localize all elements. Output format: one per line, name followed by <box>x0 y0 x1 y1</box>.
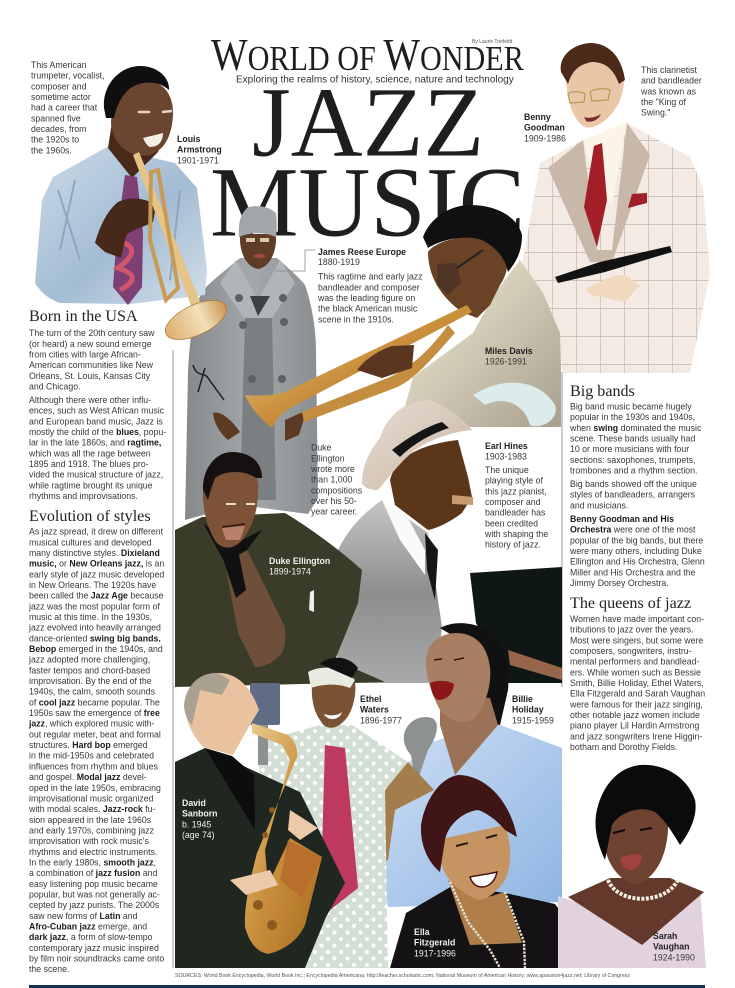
label: Duke Ellington: Duke Ellington <box>269 556 330 566</box>
label: Louis Armstrong: Armstrong <box>177 145 222 155</box>
label: Louis Armstrong blurb: trumpeter, vocalist, <box>31 71 104 81</box>
paragraph: influences from rhythm and blues <box>29 761 159 771</box>
smile and eyes <box>324 712 342 719</box>
head <box>203 464 258 548</box>
paragraph: vided the musical structure of jazz, <box>29 470 163 480</box>
label: Ethel Waters: Waters <box>360 705 389 715</box>
figure: Benny Goodman <box>522 43 710 373</box>
paragraph: musical cultures and developed <box>29 537 152 547</box>
label: Duke Ellington blurb: wrote more <box>310 464 355 474</box>
paragraph: Bebop emerged in the 1940s, and <box>29 644 163 654</box>
label: Earl Hines: 1903-1983 <box>485 452 527 462</box>
paragraph: Orchestra were one of the most <box>570 525 696 535</box>
vest <box>225 550 285 667</box>
label: Duke Ellington blurb: than 1,000 <box>311 475 352 485</box>
label: Miles Davis: Miles Davis <box>485 346 533 356</box>
paragraph: 1950s saw the emergence of free <box>29 708 160 718</box>
paragraph: ences, such as West African music <box>29 406 165 416</box>
paragraph: popular of the big bands, but there <box>570 535 703 545</box>
paragraph: Ellington and His Orchestra, Glenn <box>570 557 705 567</box>
label: Ethel Waters: 1896-1977 <box>360 715 402 725</box>
paragraph: scene. These bands usually had <box>570 433 695 443</box>
paragraph: mental performers and bandlead- <box>570 657 699 667</box>
footer rule <box>29 985 705 988</box>
neck <box>108 118 172 178</box>
paragraph: composers, songwriters, instru- <box>570 646 692 656</box>
paragraph: improvisation. By the end of the <box>29 676 152 686</box>
shirt <box>205 748 255 830</box>
subtitle: Exploring the realms of history, science, nature and technology <box>236 74 514 86</box>
hair <box>440 623 508 725</box>
paragraph: and musicians. <box>570 500 628 510</box>
label: Louis Armstrong blurb: sometime actor <box>31 92 91 102</box>
lips <box>430 681 454 700</box>
figure: Miles Davis <box>245 205 561 428</box>
paragraph: jazz was the most popular form of <box>28 601 160 611</box>
trumpet <box>245 305 472 428</box>
hair <box>595 765 696 860</box>
paragraph: Women have made important con- <box>570 614 704 624</box>
figure: Ella Fitzgerald <box>390 775 603 968</box>
label: Duke Ellington blurb: year career. <box>311 507 357 517</box>
paragraph: from cities with large African- <box>29 350 141 360</box>
title block <box>210 31 525 258</box>
neck <box>440 695 498 775</box>
paragraph: sion appeared in the late 1960s <box>29 815 152 825</box>
paragraph: were many others, including Duke <box>569 546 702 556</box>
heading: Born in the USA <box>29 308 138 325</box>
dark shirt and tie <box>203 523 262 563</box>
paragraph: The turn of the 20th century saw <box>29 328 155 338</box>
paragraph: popular, but was not generally ac- <box>29 889 160 899</box>
paragraph: 1940s, the calm, smooth sounds <box>29 687 156 697</box>
figure: Duke Ellington <box>175 452 385 687</box>
label: Earl Hines: history of jazz. <box>485 540 541 550</box>
label: James Reese Europe <box>275 247 423 324</box>
label: James Reese Europe: This ragtime and early jazz <box>318 272 423 282</box>
paragraph: jazz adopted more challenging, <box>28 655 150 665</box>
heading: Evolution of styles <box>29 508 151 525</box>
face <box>426 633 490 722</box>
smile <box>470 872 497 887</box>
label: Louis Armstrong blurb: decades, from <box>31 124 86 134</box>
paragraph: Afro-Cuban jazz emerge, and <box>29 921 147 931</box>
arm and hand <box>95 199 156 258</box>
tie <box>320 745 358 918</box>
label: Duke Ellington blurb: Duke <box>311 443 332 453</box>
sources: SOURCES: World Book Encyclopedia, World Book Inc.; Encyclopedia Americana, http://teacher.scholastic.com; National Museum of American History; www.apassion4jazz.net; Library of Congress <box>175 973 630 979</box>
paragraph: ers. While women such as Bessie <box>570 667 701 677</box>
label: Benny Goodman blurb: Swing." <box>641 108 670 118</box>
hair <box>421 775 517 872</box>
section: The queens of jazz <box>569 595 705 752</box>
paragraph: and gospel. Modal jazz devel- <box>29 772 147 782</box>
shirt <box>35 147 207 304</box>
paragraph: Jimmy Dorsey Orchestra. <box>570 578 669 588</box>
paragraph: Benny Goodman and His <box>570 514 674 524</box>
paragraph: Most were singers, but some were <box>570 635 703 645</box>
paragraph: improvisational music organized <box>29 793 154 803</box>
paragraph: trombones and a rhythm section. <box>570 465 697 475</box>
heading: Big bands <box>570 383 635 400</box>
paragraph: improvisation with rock music's <box>29 836 149 846</box>
paragraph: popular in the 1930s and 1940s, <box>570 412 695 422</box>
paragraph: music at this time. In the 1930s, <box>29 612 152 622</box>
label: Louis Armstrong blurb: spanned five <box>31 113 81 123</box>
paragraph: which was all the rage between <box>28 448 151 458</box>
label: James Reese Europe: the black American music <box>318 304 418 314</box>
label: Louis Armstrong blurb: This American <box>31 60 87 70</box>
paragraph: in New Orleans. The 1920s have <box>29 580 156 590</box>
jacket <box>175 513 385 687</box>
paragraph: 1895 and 1918. The blues pro- <box>29 459 149 469</box>
paragraph: sections: saxophones, trumpets, <box>570 455 695 465</box>
label: Benny Goodman blurb: This clarinetist <box>641 65 697 75</box>
paragraph: piano player Lil Hardin Armstrong <box>570 721 700 731</box>
paragraph: faster tempos and chord-based <box>29 665 150 675</box>
cigar <box>452 495 473 505</box>
paragraph: American communities like New <box>29 360 154 370</box>
label: Ella Fitzgerald: Ella <box>414 927 430 937</box>
label: Benny Goodman: Goodman <box>524 123 565 133</box>
label: James Reese Europe: was the leading figure on <box>317 293 415 303</box>
label: David Sanborn: b. 1945 <box>182 819 211 829</box>
label: Benny Goodman blurb: and bandleader <box>641 76 702 86</box>
paragraph: out regular meter, beat and formal <box>29 729 161 739</box>
label: James Reese Europe: 1880-1919 <box>318 257 360 267</box>
label: Ella Fitzgerald: 1917-1996 <box>414 948 456 958</box>
polka dot dress <box>258 725 408 968</box>
paragraph: Miller and His Orchestra and the <box>570 567 696 577</box>
label: David Sanborn: David <box>182 798 206 808</box>
black top <box>390 886 603 968</box>
label: Sarah Vaughan: Sarah <box>653 931 677 941</box>
label: James Reese Europe: scene in the 1910s. <box>318 314 394 324</box>
label: Earl Hines: Earl Hines <box>485 441 528 451</box>
label: Louis Armstrong blurb: the 1920s to <box>31 135 79 145</box>
smoke swirl <box>473 383 556 426</box>
paragraph: been called the Jazz Age because <box>29 591 163 601</box>
label: Earl Hines: with shaping the <box>484 529 548 539</box>
label: Miles Davis: 1926-1991 <box>485 357 527 367</box>
hands <box>357 345 414 378</box>
paragraph: a combination of jazz fusion and <box>29 868 157 878</box>
paragraph: other notable jazz women include <box>570 710 700 720</box>
series title: WORLD OF WONDER <box>211 31 524 81</box>
paragraph: botham and Dorothy Fields. <box>570 742 678 752</box>
paragraph: when swing dominated the music <box>570 423 701 433</box>
label: Benny Goodman blurb: was known as <box>640 86 697 96</box>
label: Louis Armstrong blurb: composer and <box>31 81 87 91</box>
label: Duke Ellington: 1899-1974 <box>269 567 311 577</box>
section: Evolution of styles <box>28 508 164 974</box>
paragraph: music, or New Orleans jazz, is an <box>29 559 164 569</box>
paragraph: saw new forms of Latin and <box>29 911 137 921</box>
paragraph: Orleans, St. Louis, Kansas City <box>29 371 151 381</box>
label: Earl Hines: bandleader has <box>485 508 546 518</box>
paragraph: contemporary jazz music inspired <box>29 943 159 953</box>
label: Duke Ellington blurb: Ellington <box>311 453 345 463</box>
eyes <box>456 835 497 846</box>
label: Benny Goodman blurb: the "King of <box>641 97 687 107</box>
hands <box>230 870 278 895</box>
label: David Sanborn: Sanborn <box>182 809 218 819</box>
saxophone <box>245 723 322 954</box>
hair <box>184 673 230 725</box>
paragraph: jazz evolved into heavily arranged <box>28 623 161 633</box>
label: Louis Armstrong: Louis <box>177 134 200 144</box>
label: Sarah Vaughan: 1924-1990 <box>653 952 695 962</box>
paragraph: dance-oriented swing big bands. <box>29 633 161 643</box>
label: Earl Hines: been credited <box>485 518 538 528</box>
label: Billie Holiday: 1915-1959 <box>512 715 554 725</box>
paragraph: while ragtime brought its unique <box>28 480 153 490</box>
figure: Sarah Vaughan <box>558 765 706 968</box>
paragraph: dark jazz, a form of slow-tempo <box>29 932 153 942</box>
paragraph: Big band music became hugely <box>570 401 692 411</box>
paragraph: tributions to jazz over the years. <box>570 625 694 635</box>
face <box>604 804 668 884</box>
figure: James Reese Europe <box>185 206 318 520</box>
shirt and tie <box>583 122 627 205</box>
microphone box <box>250 683 280 725</box>
paragraph: 10 or more musicians with four <box>570 444 689 454</box>
paragraph: many distinctive styles. Dixieland <box>29 548 160 558</box>
paragraph: As jazz spread, it drew on different <box>29 527 164 537</box>
paragraph: styles of bandleaders, arrangers <box>570 490 696 500</box>
hair <box>203 452 262 500</box>
label: Earl Hines: The unique <box>485 465 529 475</box>
byline: By Laurie Triefeldt <box>472 39 513 45</box>
paragraph: the scene. <box>29 964 69 974</box>
hat <box>362 400 472 490</box>
head <box>111 82 173 156</box>
figure: David Sanborn <box>175 673 345 968</box>
paragraph: Big bands showed off the unique <box>570 479 697 489</box>
label: Benny Goodman: 1909-1986 <box>524 133 566 143</box>
label: Ethel Waters: Ethel <box>360 694 381 704</box>
paragraph: and European band music, Jazz is <box>29 416 163 426</box>
paragraph: In the early 1980s, smooth jazz, <box>29 857 156 867</box>
paragraph: jazz, which explored music with- <box>29 719 154 729</box>
paragraph: Although there were other influ- <box>29 395 151 405</box>
jacket <box>405 260 561 427</box>
label: Duke Ellington blurb: over his 50- <box>311 496 357 506</box>
clarinet <box>555 246 672 283</box>
headline jazz: JAZZ <box>252 66 484 178</box>
pocket square <box>628 193 647 208</box>
paragraph: in the mid-1950s and celebrated <box>29 751 154 761</box>
paragraph: structures. Hard bop emerged <box>29 740 148 750</box>
hair <box>423 205 522 272</box>
label: Sarah Vaughan: Vaughan <box>653 942 689 952</box>
section: Born in the USA <box>28 308 166 501</box>
suit <box>175 748 345 968</box>
label: Earl Hines: playing style of <box>485 476 543 486</box>
chest <box>568 878 704 945</box>
paragraph: mostly the child of the blues, popu- <box>29 427 166 437</box>
paragraph: were famous for their jazz singing, <box>569 699 703 709</box>
white lower panel <box>175 687 563 970</box>
label: Earl Hines <box>484 441 548 550</box>
label: Louis Armstrong: 1901-1971 <box>177 155 219 165</box>
figure: Louis Armstrong <box>35 66 232 348</box>
label: James Reese Europe: bandleader and composer <box>318 282 420 292</box>
figure: Billie Holiday <box>368 623 562 907</box>
sunglasses <box>437 263 461 295</box>
paragraph: and early 1970s, combining jazz <box>29 825 154 835</box>
hair <box>104 66 169 118</box>
paragraph: oped in the late 1950s, embracing <box>29 783 161 793</box>
face <box>437 825 510 900</box>
paragraph: with modal scales. Jazz-rock fu- <box>29 804 155 814</box>
paragraph: by film noir soundtracks came onto <box>29 953 164 963</box>
head <box>428 237 508 318</box>
label: Duke Ellington blurb: compositions <box>311 485 363 495</box>
piano <box>470 567 562 683</box>
pearl necklace <box>450 882 525 968</box>
figure: Earl Hines <box>335 400 562 683</box>
tie <box>113 175 143 305</box>
head <box>312 682 355 728</box>
label: Billie Holiday: Holiday <box>512 705 544 715</box>
label: Louis Armstrong blurb: the 1960s. <box>31 145 72 155</box>
suit <box>522 123 710 373</box>
paragraph: lar in the late 1860s, and ragtime, <box>29 438 161 448</box>
label: David Sanborn: (age 74) <box>182 830 215 840</box>
label: Earl Hines: this jazz pianist, <box>485 486 547 496</box>
paragraph: (or heard) a new sound emerge <box>29 339 152 349</box>
label: Louis Armstrong blurb: had a career that <box>31 103 98 113</box>
label: James Reese Europe: James Reese Europe <box>318 247 406 257</box>
paragraph: rhythms and improvisations. <box>29 491 138 501</box>
paragraph: Ella Fitzgerald and Sarah Vaughan <box>570 689 705 699</box>
paragraph: and jazz songwriters Irene Higgin- <box>570 731 702 741</box>
section: Big bands <box>569 383 705 588</box>
arm <box>368 762 434 868</box>
head <box>185 673 259 755</box>
suit <box>335 500 442 683</box>
label: Earl Hines: composer and <box>485 497 541 507</box>
headband <box>308 668 355 688</box>
figure: Ethel Waters <box>258 658 408 968</box>
paragraph: cepted by jazz purists. The 2000s <box>29 900 160 910</box>
dress <box>558 890 706 968</box>
blouse <box>378 723 562 907</box>
trumpet <box>133 152 232 348</box>
headline music: MUSIC <box>210 146 525 258</box>
label: Ella Fitzgerald: Fitzgerald <box>414 938 455 948</box>
panel rules <box>173 350 562 968</box>
paragraph: Smith, Billie Holiday, Ethel Waters, <box>570 678 704 688</box>
label: Benny Goodman: Benny <box>524 112 551 122</box>
paragraph: of cool jazz became popular. The <box>29 697 160 707</box>
necklace <box>608 880 678 899</box>
label: Billie Holiday: Billie <box>512 694 533 704</box>
head <box>390 440 472 530</box>
paragraph: and Chicago. <box>29 382 81 392</box>
hand on keys <box>508 650 562 680</box>
skin <box>448 880 522 945</box>
heading: The queens of jazz <box>570 595 691 612</box>
paragraph: rhythms and electric instruments. <box>29 847 157 857</box>
paragraph: easy listening pop music became <box>29 879 158 889</box>
microphone <box>404 717 437 785</box>
head <box>566 55 624 127</box>
paragraph: early style of jazz music developed <box>29 569 164 579</box>
